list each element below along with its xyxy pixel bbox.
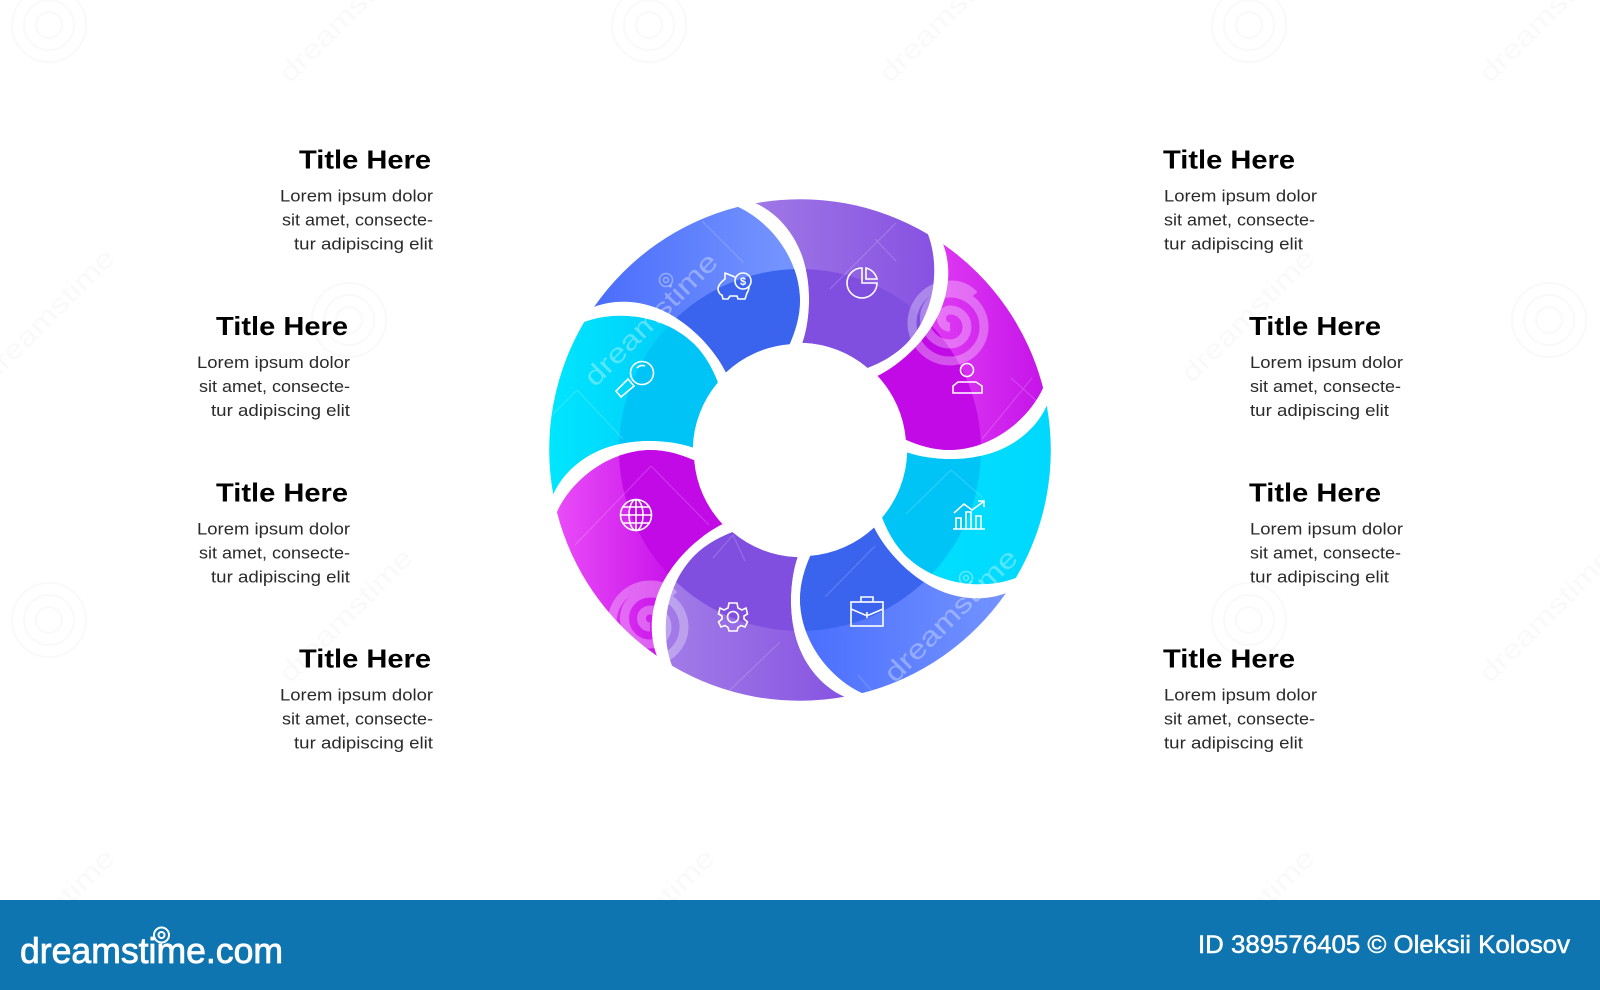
- icon: person: [953, 364, 982, 393]
- title: Title Here: [216, 311, 348, 341]
- text block: top-right: [1163, 144, 1317, 254]
- body: sit amet, consecte-: [199, 543, 350, 562]
- body: Lorem ipsum dolor: [280, 186, 433, 206]
- footer credit: ID 389576405 © Oleksii Kolosov: [1198, 931, 1571, 959]
- body: [1250, 519, 1403, 586]
- body: tur adipiscing elit: [1250, 567, 1389, 586]
- title: Title Here: [1249, 311, 1381, 341]
- watermark on ring: [578, 247, 1024, 688]
- body: Lorem ipsum dolor: [1164, 186, 1317, 206]
- title: Title Here: [1163, 144, 1295, 174]
- body: tur adipiscing elit: [1164, 234, 1303, 254]
- segment 1: blue top-left: [594, 207, 800, 372]
- body: tur adipiscing elit: [294, 734, 433, 753]
- watermark on ring: dreamstime: [578, 247, 724, 392]
- icon: briefcase: [851, 597, 883, 626]
- body: [1164, 686, 1317, 753]
- background watermark pattern: dreamstime: [1175, 843, 1321, 988]
- text block: bottom-left: [280, 644, 433, 753]
- icon: piggy bank: $: [740, 276, 746, 288]
- body: Lorem ipsum dolor: [197, 353, 350, 372]
- segment 7: magenta left: [557, 450, 722, 656]
- body: tur adipiscing elit: [211, 401, 350, 420]
- icon: pie chart: [847, 268, 877, 298]
- body: Lorem ipsum dolor: [197, 519, 350, 538]
- text block: mid-upper right: [1249, 311, 1403, 420]
- text block: mid-lower right: [1249, 477, 1403, 586]
- background watermark pattern: dreamstime: [1473, 543, 1600, 688]
- body: Lorem ipsum dolor: [1250, 519, 1403, 538]
- title: Title Here: [299, 144, 431, 174]
- body: Lorem ipsum dolor: [1250, 353, 1403, 372]
- title: Title Here: [1163, 644, 1295, 674]
- title: Title Here: [216, 477, 348, 507]
- body: [197, 353, 350, 420]
- body: [280, 186, 433, 254]
- segment 5: blue bottom: [800, 528, 1006, 693]
- body: [197, 519, 350, 586]
- body: sit amet, consecte-: [1164, 710, 1315, 729]
- body: tur adipiscing elit: [1250, 401, 1389, 420]
- body: tur adipiscing elit: [211, 567, 350, 586]
- footer band: [0, 900, 1600, 990]
- body: tur adipiscing elit: [1164, 734, 1303, 753]
- body: Lorem ipsum dolor: [1164, 686, 1317, 705]
- text block: top-left: [280, 144, 433, 254]
- body: sit amet, consecte-: [199, 377, 350, 396]
- icon: globe: [620, 500, 652, 530]
- cycle ring diagram: [549, 199, 1051, 701]
- body: Lorem ipsum dolor: [280, 686, 433, 705]
- body: [280, 686, 433, 753]
- icon: magnifier: [616, 362, 654, 397]
- icon: gear: [718, 603, 748, 631]
- text block: mid-lower left: [197, 477, 350, 586]
- segment 4: cyan right: [882, 406, 1051, 584]
- watermark lines on ring: [553, 221, 1040, 690]
- body: [1164, 186, 1317, 254]
- body: sit amet, consecte-: [1164, 210, 1315, 230]
- background watermark pattern: dreamstime: [273, 543, 419, 688]
- watermark on ring: dreamstime: [878, 543, 1024, 688]
- title: Title Here: [299, 644, 431, 674]
- segment 6: purple bottom: [666, 532, 844, 701]
- icon: piggy bank: [718, 273, 751, 299]
- segment 3: magenta right: [878, 244, 1043, 450]
- icon: growth chart: [953, 501, 985, 529]
- body: sit amet, consecte-: [282, 210, 433, 230]
- text block: mid-upper left: [197, 311, 350, 420]
- background watermark pattern: dreamstime: [575, 843, 721, 988]
- body: sit amet, consecte-: [1250, 543, 1401, 562]
- background watermark pattern: dreamstime: [1175, 243, 1321, 388]
- segment 8: cyan left: [549, 316, 718, 494]
- title: Title Here: [1249, 477, 1381, 507]
- text block: bottom-right: [1163, 644, 1317, 753]
- footer logo: dreamstime.com: [20, 930, 283, 971]
- body: sit amet, consecte-: [1250, 377, 1401, 396]
- body: sit amet, consecte-: [282, 710, 433, 729]
- body: [1250, 353, 1403, 420]
- segment 2: purple top: [756, 199, 934, 368]
- body: tur adipiscing elit: [294, 234, 433, 254]
